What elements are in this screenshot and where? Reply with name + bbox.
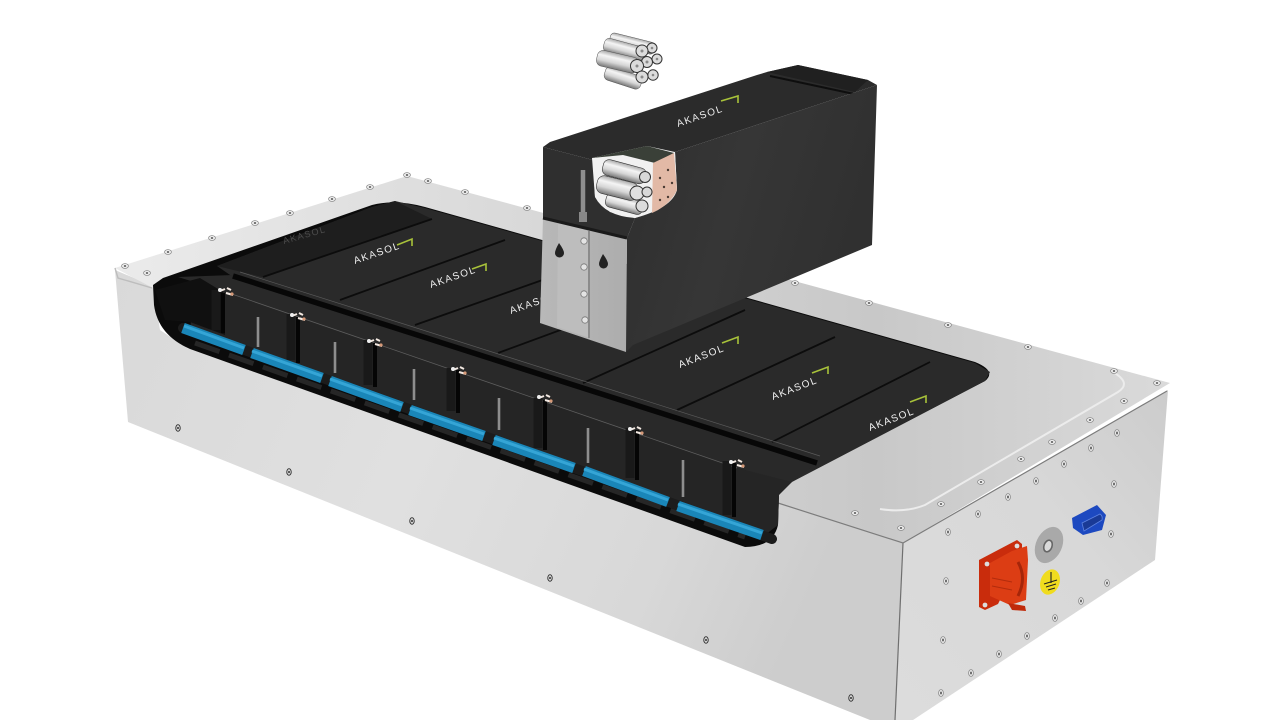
- floating module: [540, 65, 877, 352]
- top cover plate: [115, 176, 1170, 543]
- logo green marks: [397, 239, 926, 403]
- faint rear logo: AKASOL: [282, 224, 327, 246]
- front row module tops: [178, 275, 817, 483]
- yellow ground label: [1037, 567, 1063, 597]
- terminals: [218, 288, 745, 468]
- module side faces: [190, 283, 792, 535]
- module top face: [543, 65, 877, 160]
- logos on modules: AKASOL: [867, 406, 916, 434]
- gray mounting bracket: [540, 218, 627, 352]
- gray grommet: [1029, 522, 1069, 568]
- screws on right face: [939, 430, 1119, 696]
- cutaway circuit board: [592, 146, 674, 163]
- module front face: [543, 147, 635, 238]
- module tops (back row): [217, 201, 990, 483]
- module seam shoulders: [216, 290, 727, 515]
- corner edge line: [895, 543, 903, 720]
- divider lines on module tops: [263, 219, 930, 442]
- floating cell cluster: [595, 32, 662, 90]
- logos on modules: AKASOL: [770, 375, 819, 403]
- bracket keyholes: [555, 243, 564, 258]
- battery cavity: [153, 202, 989, 547]
- module logo mark: [721, 96, 738, 103]
- pack front face: [115, 270, 903, 720]
- screws on front face: [176, 425, 853, 701]
- cutaway window: [592, 146, 677, 218]
- lower mount blocks: [195, 343, 745, 537]
- red power connector: [979, 540, 1028, 611]
- plate embossed lip: [880, 372, 1124, 510]
- latch strip: [581, 170, 585, 216]
- logos on modules: AKASOL: [428, 265, 478, 291]
- black band between rows: [233, 276, 817, 463]
- logos on modules: AKASOL: [352, 241, 402, 267]
- module side face: [626, 85, 877, 352]
- logos on modules: AKASOL: [677, 343, 726, 371]
- screws on plate: [122, 173, 1160, 530]
- rear shaded strip: [217, 201, 432, 277]
- cutaway copper plate: [652, 153, 677, 213]
- cooling tube: [183, 326, 772, 539]
- logos on modules: AKASOL: [508, 291, 558, 317]
- plate edge line: [778, 391, 1167, 543]
- module seams: [223, 293, 734, 517]
- logos on modules: [352, 241, 916, 434]
- module logo: AKASOL: [675, 104, 725, 130]
- pack right face: [895, 390, 1168, 720]
- bracket screws: [581, 238, 588, 323]
- blue signal connector: [1072, 505, 1106, 535]
- gray side strips: [258, 317, 683, 497]
- cutaway cells: [595, 158, 648, 216]
